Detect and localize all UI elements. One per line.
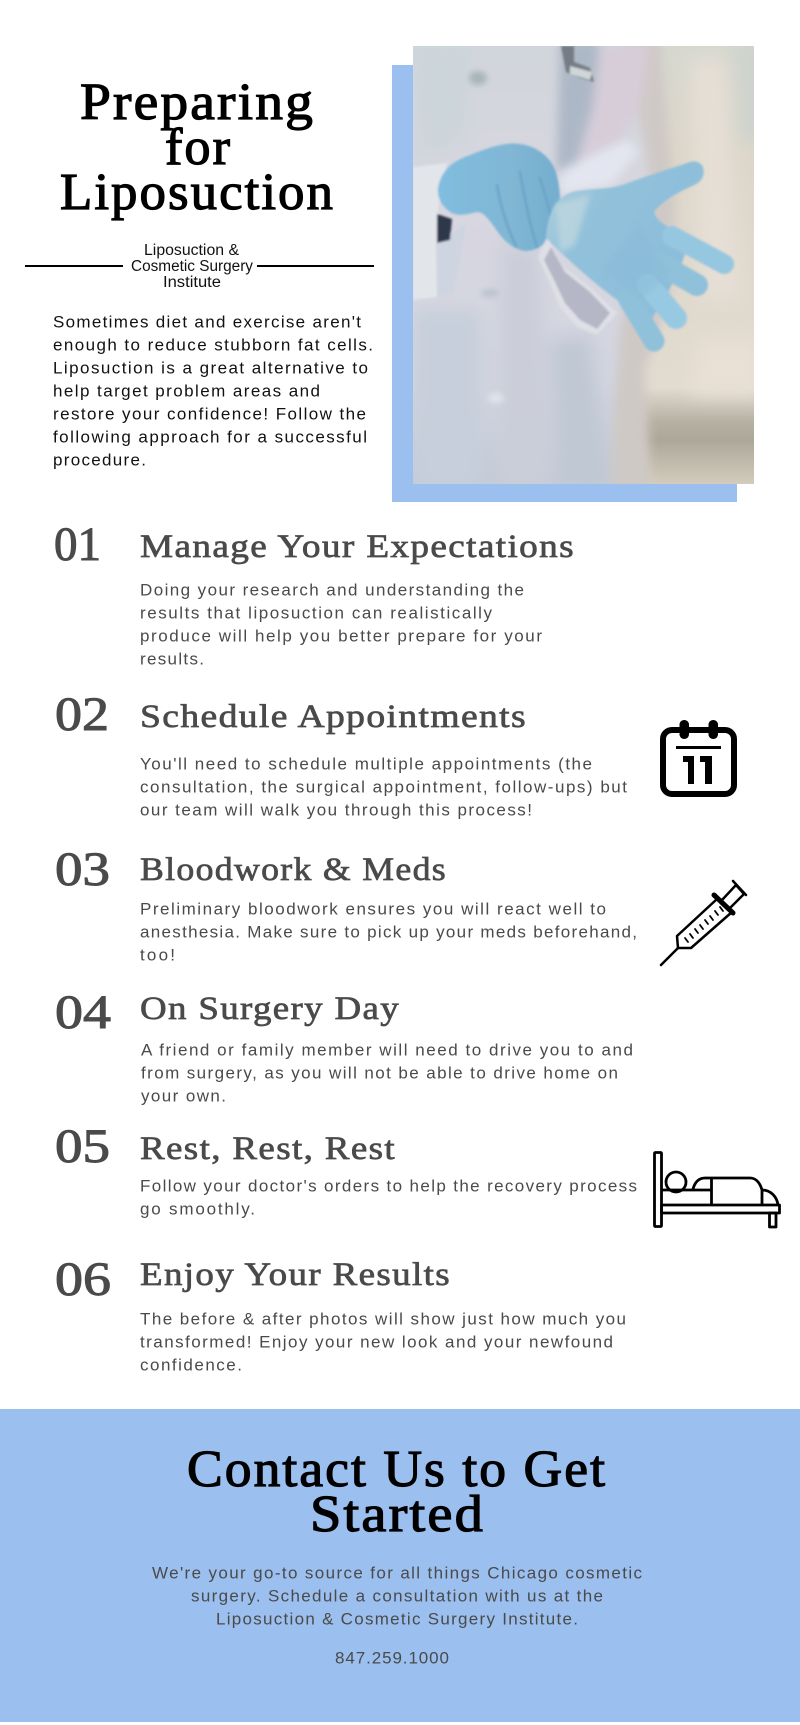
step 06: Enjoy Your Results xyxy=(140,1257,451,1293)
intro paragraph: Liposuction is a great alternative to xyxy=(53,358,368,378)
step 03: Bloodwork & Meds xyxy=(140,852,447,888)
step 02 xyxy=(55,688,627,820)
step 04 xyxy=(55,986,633,1106)
subtitle with divider lines: Institute xyxy=(163,274,221,291)
step 02: consultation, the surgical appointment, follow-ups) but xyxy=(140,778,627,796)
step 01: results. xyxy=(140,650,204,668)
subtitle with divider lines xyxy=(25,242,374,291)
intro paragraph xyxy=(53,312,373,470)
step 04: from surgery, as you will not be able to drive home on xyxy=(141,1064,618,1082)
step 02: Schedule Appointments xyxy=(140,699,527,735)
step 01: produce will help you better prepare for your xyxy=(140,626,542,646)
title: Preparing xyxy=(80,74,315,131)
right glove xyxy=(546,161,724,341)
stethoscope xyxy=(561,46,594,82)
step 01: 01 xyxy=(54,518,101,571)
contact heading: Contact Us to Get xyxy=(187,1441,607,1498)
blue backing panel xyxy=(392,65,737,502)
intro paragraph: enough to reduce stubborn fat cells. xyxy=(53,336,373,354)
subtitle with divider lines: Liposuction & xyxy=(144,242,240,259)
step 03: 03 xyxy=(55,843,110,896)
left glove xyxy=(438,144,560,251)
panel: contact footer xyxy=(0,1409,800,1722)
step 01: Manage Your Expectations xyxy=(140,529,575,565)
step 05: go smoothly. xyxy=(140,1200,255,1218)
step 06: confidence. xyxy=(140,1356,242,1374)
title: Liposuction xyxy=(60,164,335,221)
contact text: We're your go-to source for all things Chicago cosmetic xyxy=(152,1564,642,1582)
intro paragraph: procedure. xyxy=(53,450,146,470)
sleeve and cuff xyxy=(413,163,447,300)
step 03: too! xyxy=(140,946,175,964)
step 04: 04 xyxy=(55,986,111,1039)
intro paragraph: Sometimes diet and exercise aren't xyxy=(53,312,361,332)
title xyxy=(60,74,335,221)
step 02: our team will walk you through this process! xyxy=(140,800,532,820)
step 05: Follow your doctor's orders to help the recovery process xyxy=(140,1176,637,1196)
step 04: your own. xyxy=(141,1086,226,1106)
phone number: 847.259.1000 xyxy=(335,1648,449,1668)
step 02: You'll need to schedule multiple appointments (the xyxy=(140,754,592,774)
contact heading: Started xyxy=(310,1486,485,1543)
step 03: anesthesia. Make sure to pick up your meds beforehand, xyxy=(140,922,637,942)
photo: gloved hands xyxy=(413,46,754,484)
icon: calendar xyxy=(663,720,734,794)
step 05: 05 xyxy=(55,1120,110,1173)
step 01: Doing your research and understanding the xyxy=(140,580,524,600)
icon: syringe xyxy=(661,881,746,965)
contact text: Liposuction & Cosmetic Surgery Institute. xyxy=(216,1610,578,1628)
title: for xyxy=(165,119,232,176)
intro paragraph: restore your confidence! Follow the xyxy=(53,404,366,424)
step 04: On Surgery Day xyxy=(140,991,400,1027)
step 03: Preliminary bloodwork ensures you will react well to xyxy=(140,900,606,918)
contact text xyxy=(152,1564,642,1628)
step 03 xyxy=(55,843,637,964)
intro paragraph: help target problem areas and xyxy=(53,382,320,400)
subtitle with divider lines: Cosmetic Surgery xyxy=(131,258,253,275)
step 06: transformed! Enjoy your new look and your newfound xyxy=(140,1332,613,1352)
step 06 xyxy=(55,1253,626,1374)
step 05 xyxy=(55,1120,637,1218)
step 04: A friend or family member will need to drive you to and xyxy=(141,1040,633,1060)
step 02: 02 xyxy=(55,688,109,741)
step 05: Rest, Rest, Rest xyxy=(140,1131,396,1167)
step 06: 06 xyxy=(55,1253,111,1306)
step 01 xyxy=(54,518,575,668)
contact heading xyxy=(187,1441,607,1543)
icon: bed xyxy=(654,1152,780,1227)
right cuff xyxy=(538,237,617,335)
intro paragraph: following approach for a successful xyxy=(53,428,367,446)
step 06: The before & after photos will show just how much you xyxy=(140,1310,626,1328)
step 01: results that liposuction can realistically xyxy=(140,604,493,622)
coat buttons xyxy=(469,71,487,85)
contact text: surgery. Schedule a consultation with us at the xyxy=(191,1586,603,1606)
